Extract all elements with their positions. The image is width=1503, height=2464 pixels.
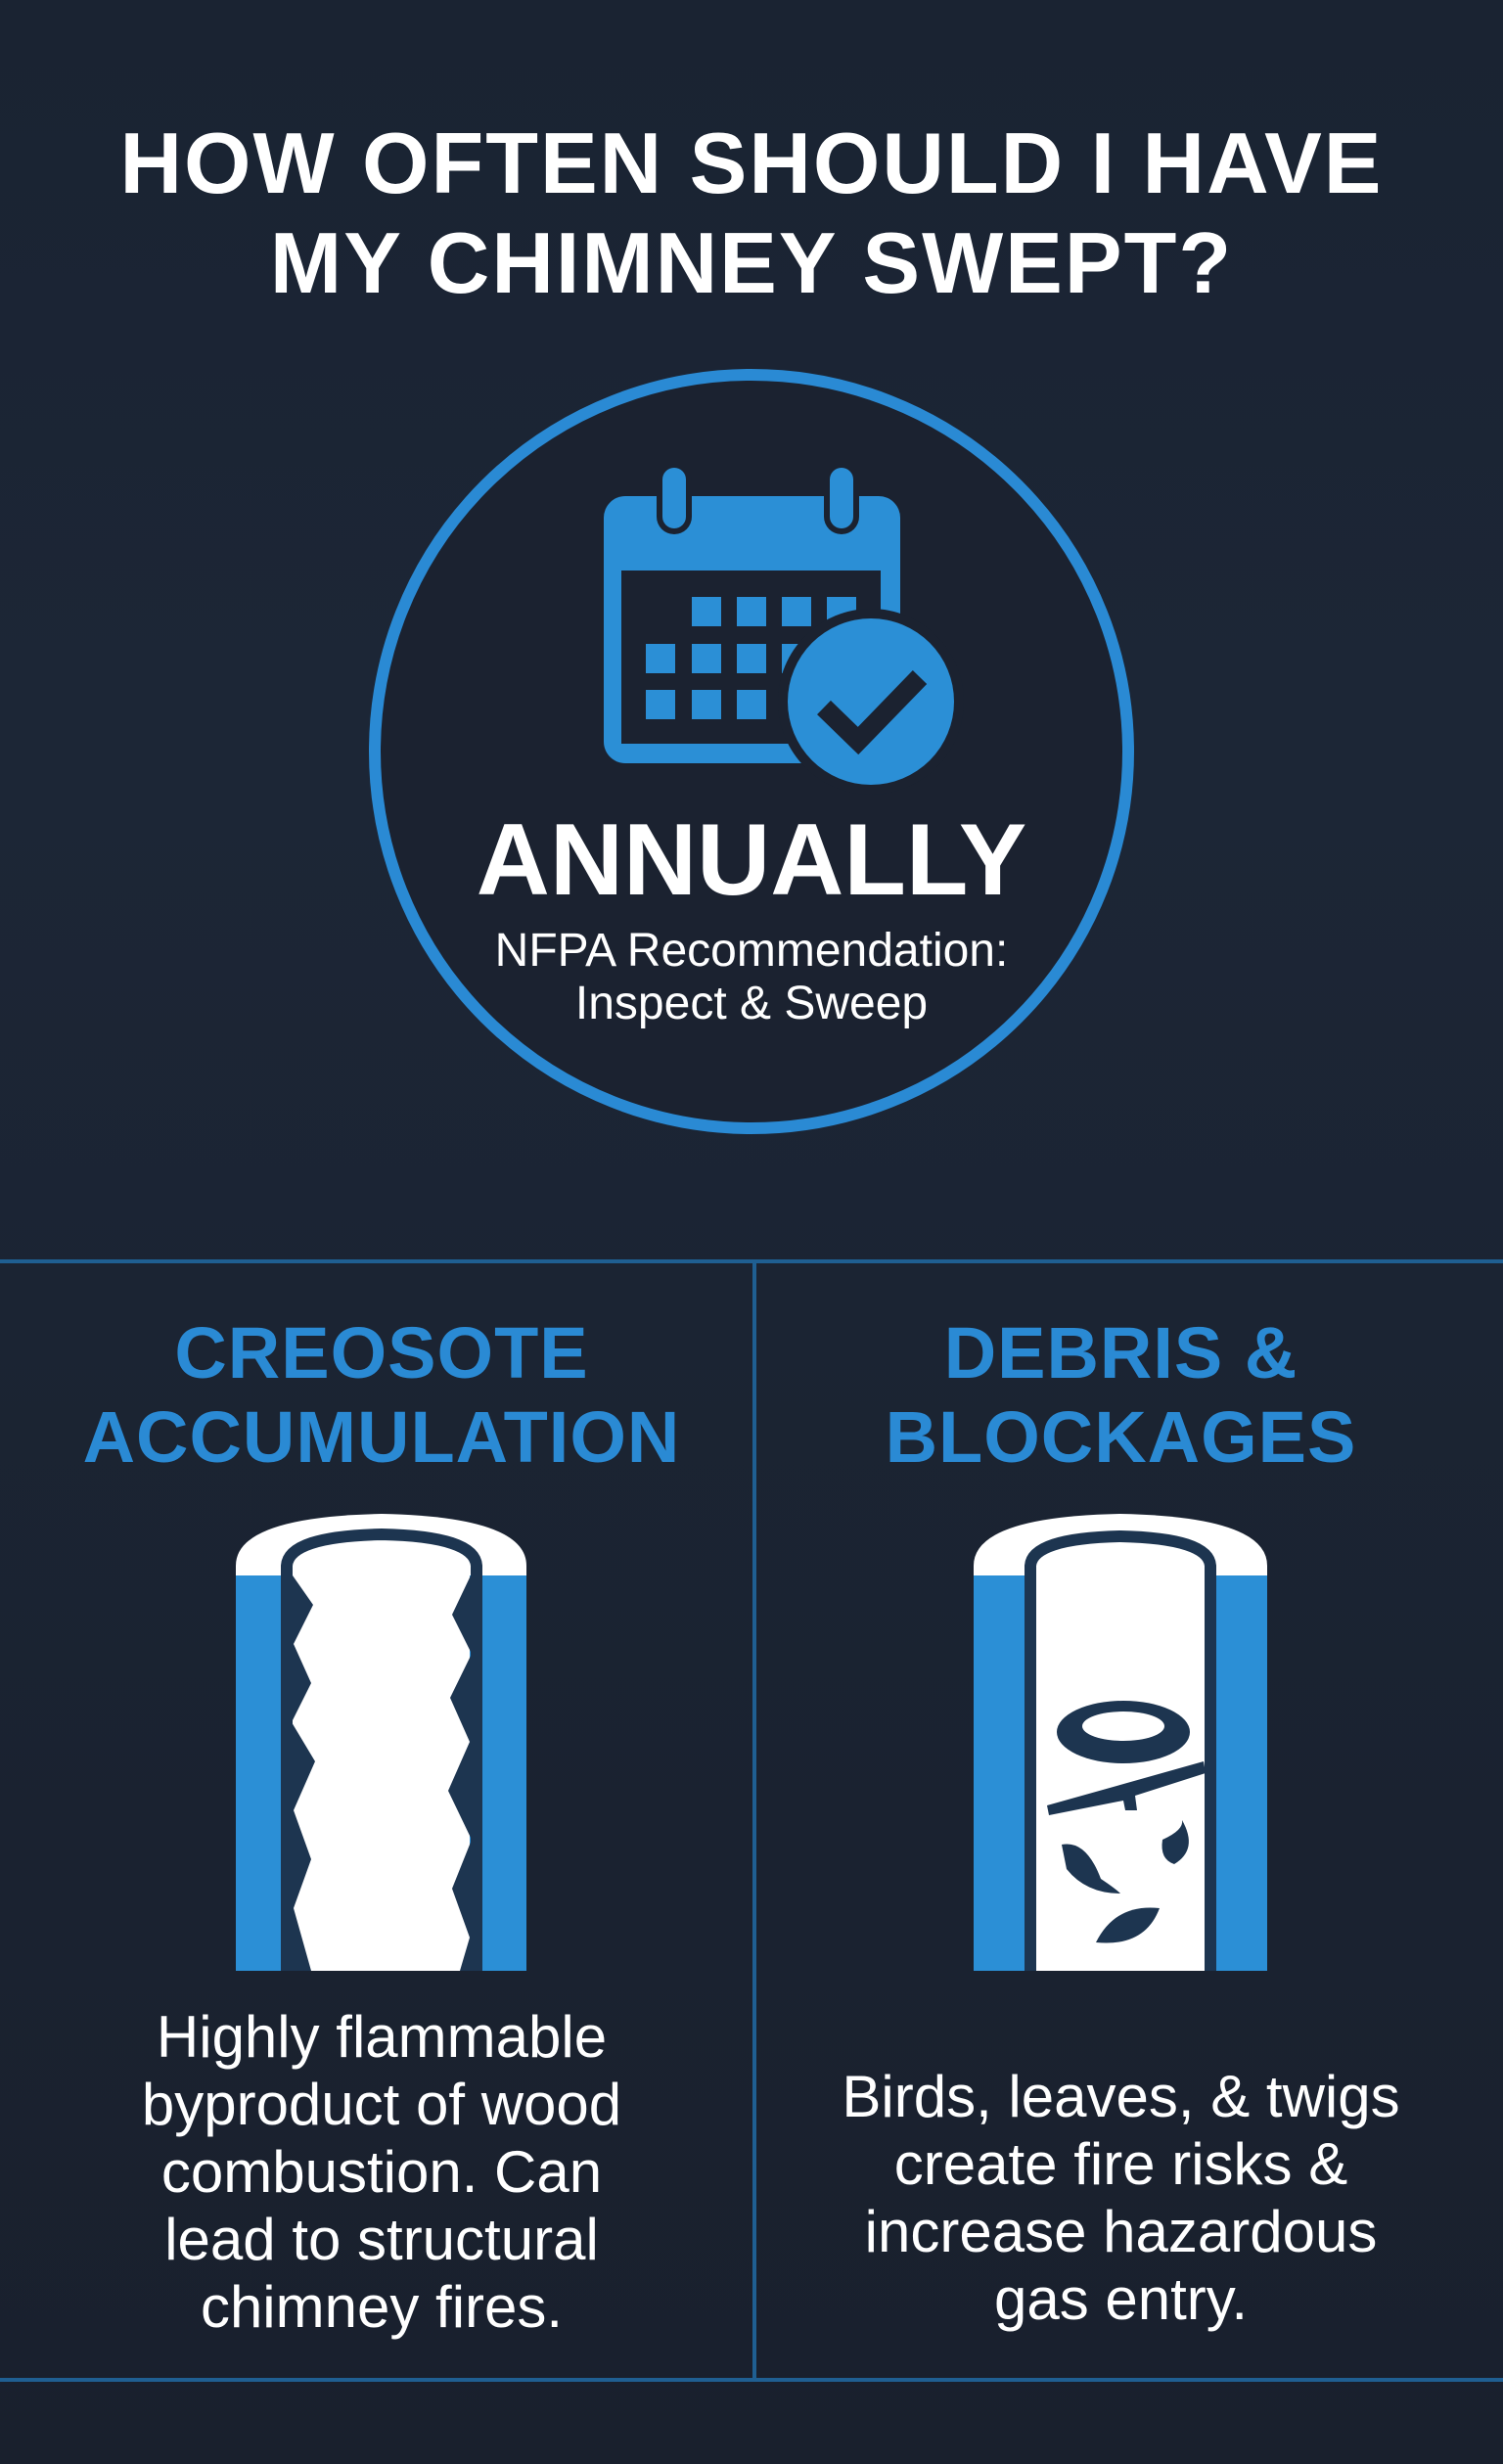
heading: debris & blockages: DEBRIS & <box>944 1312 1298 1393</box>
text: debris description: increase hazardous <box>865 2199 1377 2264</box>
text: creosote description: chimney fires. <box>201 2274 563 2340</box>
heading: creosote accumulation: CREOSOTE <box>174 1312 589 1393</box>
circle badge <box>369 369 1134 1134</box>
nest <box>1047 1701 1206 1943</box>
heading: creosote accumulation <box>83 1312 680 1478</box>
text: NFPA recommendation: NFPA Recommendation: <box>495 925 1008 977</box>
text: creosote description: combustion. Can <box>161 2139 602 2205</box>
circle badge: Inspect & Sweep <box>575 978 928 1029</box>
text: creosote description <box>142 2004 621 2340</box>
icon: chimney with creosote <box>236 1514 526 1971</box>
text: creosote description: byproduct of wood <box>142 2072 621 2137</box>
icon: chimney with nest and leaves <box>974 1514 1267 1971</box>
text: creosote description: Highly flammable <box>157 2004 607 2070</box>
heading: debris & blockages: BLOCKAGES <box>886 1396 1356 1478</box>
text: debris description: gas entry. <box>994 2266 1248 2332</box>
text: debris description <box>842 2064 1400 2332</box>
title: MY CHIMNEY SWEPT? <box>270 214 1233 311</box>
text: debris description: create fire risks & <box>894 2131 1347 2197</box>
icon: calendar with check <box>604 464 964 795</box>
panel: creosote <box>83 1312 680 2340</box>
text: creosote description: lead to structural <box>164 2207 599 2272</box>
heading: annually: ANNUALLY <box>477 803 1026 917</box>
heading: creosote accumulation: ACCUMULATION <box>83 1396 680 1478</box>
heading: debris & blockages <box>886 1312 1356 1478</box>
title <box>119 114 1384 311</box>
text: debris description: Birds, leaves, & twigs <box>842 2064 1400 2129</box>
panel: debris <box>842 1312 1400 2332</box>
title: HOW OFTEN SHOULD I HAVE <box>119 114 1384 211</box>
